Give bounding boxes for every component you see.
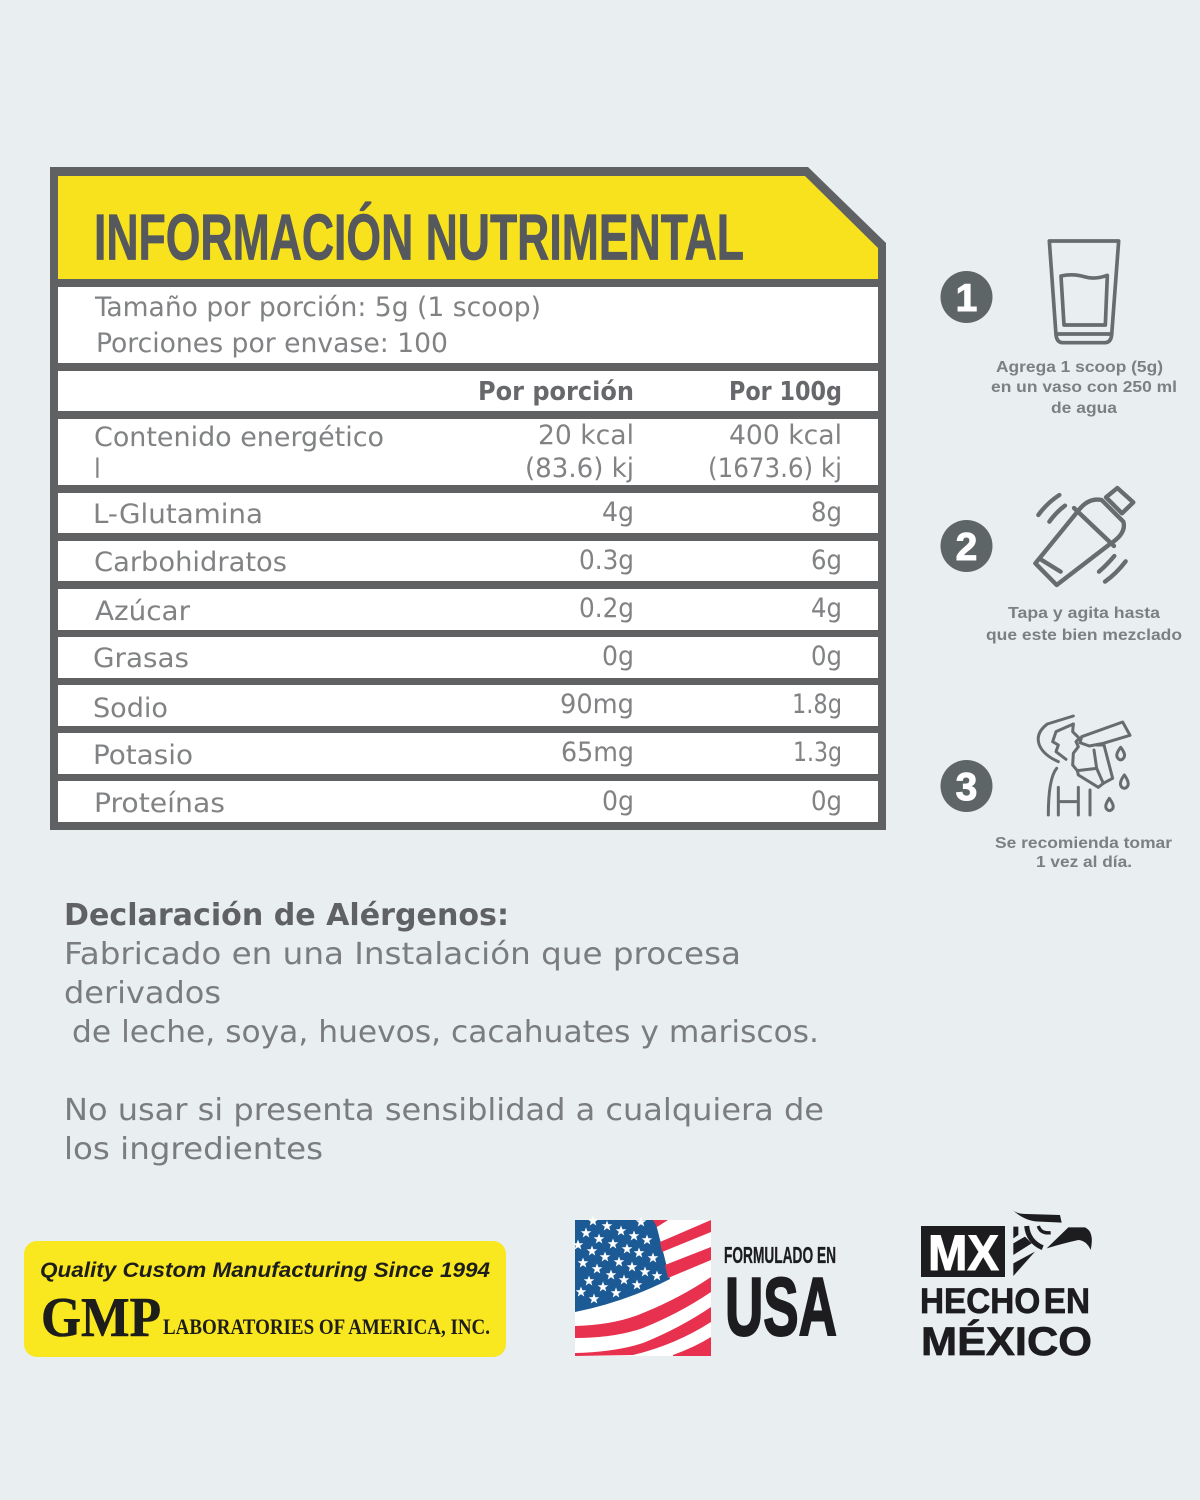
step 1: [940, 241, 1177, 417]
serving information: [58, 287, 878, 363]
logo: GMP Laboratories: [24, 1241, 506, 1357]
row: Proteínas: [58, 781, 878, 822]
step 2 caption: Tapa y agita hasta: [1008, 605, 1160, 622]
row: Azúcar: 0.2g: [579, 593, 634, 624]
row: energy: (83.6) kj: [525, 453, 634, 484]
row: L-Glutamina: 8g: [811, 497, 842, 528]
step 1 caption: Agrega 1 scoop (5g): [996, 359, 1163, 376]
table header: Por 100g: [729, 377, 842, 407]
icon: American flag: [573, 1216, 711, 1356]
row: Potasio: Potasio: [93, 740, 193, 771]
row: Grasas: 0g: [811, 641, 842, 672]
formulated in text: FORMULADO EN: [724, 1242, 836, 1268]
icon: eagle head: [1013, 1210, 1092, 1276]
row: Carbohidratos: 0.3g: [579, 545, 634, 576]
Mexico text: MÉXICO: [921, 1319, 1092, 1364]
row: energy: 20 kcal: [538, 420, 634, 451]
step 1 caption: en un vaso con 250 ml: [991, 379, 1177, 396]
row: energy: 400 kcal: [729, 420, 842, 451]
row: Carbohidratos: [58, 541, 878, 581]
logo: GMP Laboratories: Quality Custom Manufacturing Since 1994: [40, 1258, 490, 1282]
serving information: Porciones por envase: 100: [96, 328, 448, 359]
step 3 caption: 1 vez al día.: [1036, 854, 1132, 871]
row: Grasas: [58, 637, 878, 678]
step 2: [940, 488, 1182, 644]
allergen statement: [64, 937, 819, 1050]
row: Proteínas: 0g: [602, 786, 634, 817]
step 2 caption: [986, 605, 1182, 644]
row: Azúcar: Azúcar: [95, 596, 190, 627]
row: energy: [58, 419, 878, 485]
logo: formulated in USA: [573, 1216, 837, 1356]
table header: [58, 371, 878, 411]
step 1 caption: [991, 359, 1177, 417]
row: L-Glutamina: [58, 493, 878, 533]
row: energy: (1673.6) kj: [708, 453, 842, 484]
step 2 caption: que este bien mezclado: [986, 627, 1182, 644]
allergen statement: Fabricado en una Instalación que procesa: [64, 937, 741, 972]
icon: person drinking: [1038, 716, 1130, 815]
USA text: USA: [725, 1260, 837, 1353]
number badge 3: [940, 760, 992, 812]
row: energy: Contenido energético: [94, 422, 384, 453]
number badge 2: 2: [956, 526, 977, 569]
sensitivity warning: No usar si presenta sensiblidad a cualquiera de: [64, 1093, 824, 1128]
row: Sodio: Sodio: [93, 693, 168, 724]
row: Proteínas: 0g: [811, 786, 842, 817]
panel frame: [50, 167, 886, 830]
icon: glass of water: [1049, 241, 1119, 343]
row: L-Glutamina: L-Glutamina: [93, 499, 263, 530]
serving information: Tamaño por porción: 5g (1 scoop): [94, 292, 541, 323]
row: Carbohidratos: 6g: [811, 545, 842, 576]
row: Sodio: [58, 685, 878, 726]
row: Potasio: 65mg: [561, 737, 634, 768]
row: energy: l: [94, 454, 101, 485]
number badge 2: [940, 520, 992, 572]
allergen statement: de leche, soya, huevos, cacahuates y mariscos.: [72, 1015, 819, 1050]
row: L-Glutamina: 4g: [602, 497, 634, 528]
number badge 1: [940, 271, 992, 323]
step 3 caption: [995, 835, 1172, 871]
row: Sodio: 1.8g: [792, 689, 842, 720]
row: Azúcar: 4g: [811, 593, 842, 624]
title band: [58, 176, 878, 279]
step 3 caption: Se recomienda tomar: [995, 835, 1172, 852]
row: Grasas: 0g: [602, 641, 634, 672]
table header: Por porción: [478, 377, 634, 407]
MX box: MX: [928, 1225, 999, 1281]
logo: GMP Laboratories: LABORATORIES OF AMERICA, INC.: [163, 1314, 490, 1339]
icon: shaker: [1035, 488, 1133, 585]
row: Potasio: [58, 733, 878, 774]
number badge 3: 3: [956, 766, 977, 809]
allergen declaration: [64, 898, 824, 1167]
panel: nutrition table: [50, 167, 886, 830]
step 1 caption: de agua: [1051, 400, 1117, 417]
row: Sodio: 90mg: [560, 689, 634, 720]
number badge 1: 1: [956, 277, 977, 320]
logo: GMP Laboratories: GMP: [41, 1287, 161, 1349]
row: Proteínas: Proteínas: [94, 788, 225, 819]
logo: made in Mexico: [920, 1210, 1092, 1364]
made in text: HECHO EN: [920, 1282, 1090, 1321]
sensitivity warning: [64, 1093, 824, 1167]
allergen statement: derivados: [64, 976, 221, 1011]
row: Azúcar: [58, 589, 878, 630]
step 3: [940, 716, 1172, 871]
sensitivity warning: los ingredientes: [64, 1132, 323, 1167]
row: Carbohidratos: Carbohidratos: [94, 547, 287, 578]
title: INFORMACIÓN NUTRIMENTAL: [94, 200, 744, 274]
allergen heading: Declaración de Alérgenos:: [64, 898, 509, 933]
row: Grasas: Grasas: [93, 643, 189, 674]
row: Potasio: 1.3g: [793, 737, 842, 768]
